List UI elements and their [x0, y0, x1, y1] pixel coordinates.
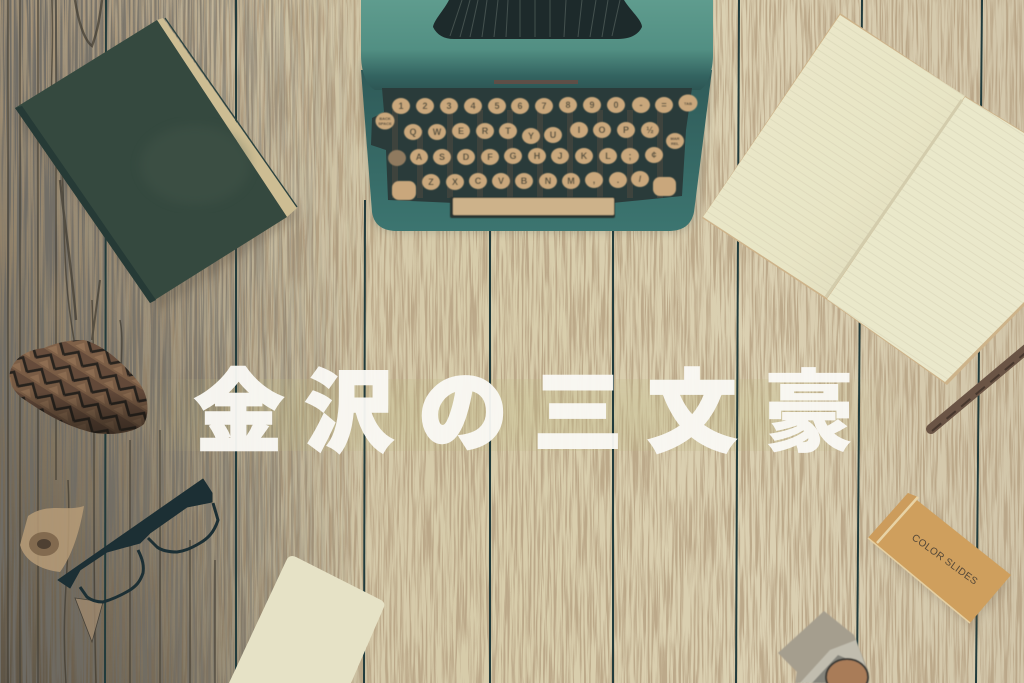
box label: COLOR SLIDES — [909, 532, 980, 588]
typewriter key labels: S — [439, 152, 445, 162]
twig — [931, 346, 1024, 431]
typewriter key labels: ½ — [646, 125, 654, 135]
typewriter key labels: R — [482, 126, 489, 136]
notebook right page — [827, 97, 1024, 382]
typewriter key labels: U — [550, 130, 556, 140]
typewriter key labels: ¢ — [651, 150, 657, 160]
typewriter keys: MAR — [670, 136, 680, 141]
typewriter key labels: 4 — [470, 101, 476, 111]
typewriter key labels — [398, 100, 667, 187]
bottle cork — [826, 659, 868, 683]
typewriter key labels: A — [416, 152, 423, 162]
typewriter keyboard well — [371, 88, 692, 203]
typewriter key labels: C — [475, 176, 482, 186]
typewriter key labels: O — [598, 125, 606, 135]
typewriter key labels: E — [458, 126, 464, 136]
title: 沢 — [304, 363, 394, 463]
title: 文 — [648, 363, 736, 463]
typewriter key labels: , — [593, 175, 595, 185]
typewriter key labels: - — [640, 100, 642, 110]
typewriter key labels: 5 — [494, 101, 500, 111]
typewriter key labels: ; — [628, 151, 632, 161]
typewriter keys — [376, 94, 698, 218]
typewriter key labels: Q — [409, 127, 417, 137]
typewriter key labels: N — [545, 176, 551, 186]
pine cone — [10, 340, 147, 434]
wood knot — [20, 506, 103, 642]
typewriter key labels: Z — [428, 177, 434, 187]
typewriter key labels: W — [433, 127, 442, 137]
typewriter keys: TAB — [684, 101, 692, 106]
color slides box — [868, 493, 1012, 628]
typewriter lid — [361, 0, 713, 90]
typewriter key labels: L — [605, 151, 611, 161]
book — [15, 18, 300, 310]
title: 豪 — [764, 363, 854, 463]
eyeglasses — [58, 479, 218, 602]
typewriter key labels: Y — [528, 131, 534, 141]
typewriter key labels: 0 — [613, 100, 619, 110]
typewriter space bar — [450, 197, 615, 218]
typewriter key labels: . — [617, 175, 619, 185]
typewriter key labels: X — [452, 177, 458, 187]
typewriter — [361, 0, 713, 231]
typewriter key labels: G — [509, 151, 517, 161]
typewriter key labels: J — [557, 151, 563, 161]
typewriter key labels: 8 — [565, 100, 571, 110]
typewriter key labels: B — [521, 176, 528, 186]
notebook left page — [703, 15, 965, 298]
typewriter key labels: / — [639, 174, 642, 184]
typewriter key labels: F — [487, 152, 493, 162]
typewriter carriage opening — [433, 0, 642, 39]
memo card — [229, 556, 384, 683]
typewriter key labels: 9 — [589, 100, 595, 110]
typewriter keys: BACK — [379, 116, 391, 121]
typewriter key labels: K — [581, 151, 588, 161]
typewriter keys: SPACE — [378, 121, 392, 126]
title: 金 — [194, 363, 284, 463]
typewriter key labels: 3 — [446, 101, 452, 111]
typewriter key labels: 1 — [398, 101, 404, 111]
glass bottle — [778, 611, 868, 683]
typewriter key labels: 6 — [517, 101, 523, 111]
typewriter key labels: = — [661, 100, 667, 110]
typewriter key labels: I — [578, 125, 580, 135]
typewriter keys: REL — [671, 141, 680, 146]
typewriter key labels: D — [463, 152, 470, 162]
typewriter key labels: T — [505, 126, 511, 136]
typewriter key labels: V — [498, 176, 504, 186]
typewriter key labels: H — [534, 151, 540, 161]
book cover — [15, 20, 287, 303]
typewriter key labels: 7 — [541, 101, 547, 111]
title: の — [418, 363, 508, 463]
typewriter key labels: M — [567, 176, 575, 186]
typewriter lower body — [361, 70, 712, 231]
book page edges — [157, 18, 297, 217]
typewriter key labels: 2 — [422, 101, 428, 111]
title: 三 — [534, 363, 622, 463]
title — [194, 363, 854, 463]
open notebook — [702, 13, 1024, 385]
typewriter key labels: P — [623, 125, 629, 135]
